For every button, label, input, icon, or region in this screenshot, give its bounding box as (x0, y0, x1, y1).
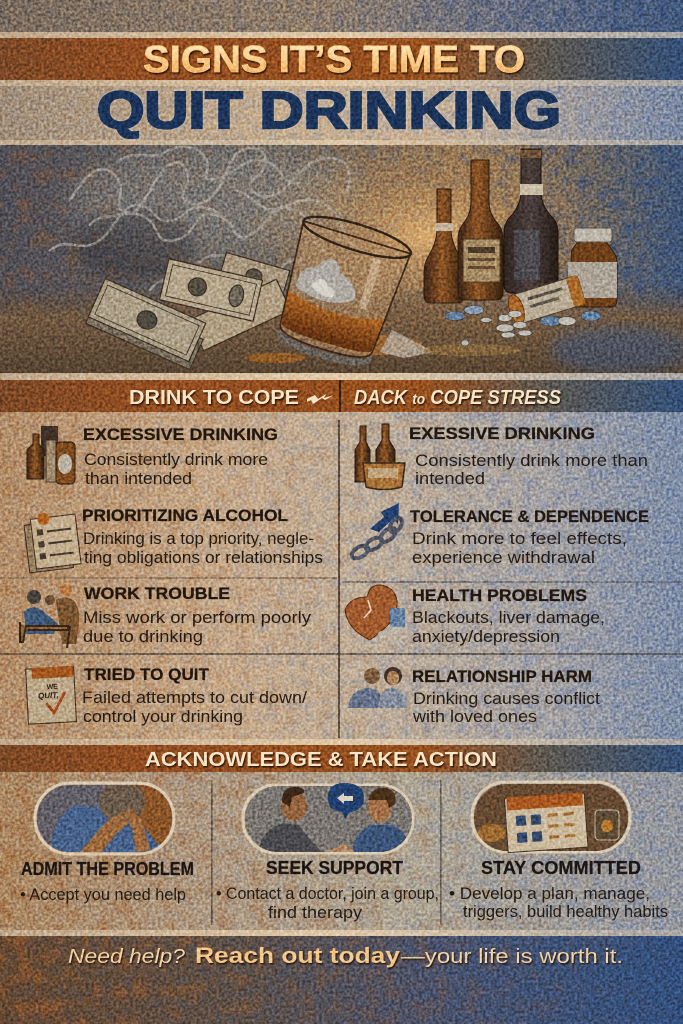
grid of warning signs (0, 420, 683, 738)
hero: beer bottle left (424, 189, 464, 303)
hero: beer bottle left neck label (435, 223, 453, 231)
icon: broken heart and pills (345, 585, 405, 644)
sign: tolerance and dependence: Drink more to feel effects, (412, 529, 627, 548)
sign: relationship harm: with loved ones (412, 707, 537, 726)
illustration: calendar and jar (470, 780, 632, 855)
hero: dark bottle (504, 149, 558, 293)
icon: calendar with check: QUIT, (38, 691, 59, 701)
hero: spill on table (245, 330, 520, 363)
divider strip under hero (0, 373, 683, 381)
sign: work trouble: WORK TROUBLE (84, 585, 230, 603)
hero illustration (0, 130, 683, 375)
icon: calendar with check (26, 666, 76, 724)
icon: squiggle arrow (307, 394, 334, 404)
sign: prioritizing alcohol: PRIORITIZING ALCOHOL (82, 507, 288, 525)
icon: calendar with check: WE (46, 684, 58, 691)
action: stay committed: • Develop a plan, manage, (449, 884, 650, 903)
band heading left: DRINK TO COPE (129, 387, 299, 409)
footer message (68, 943, 623, 968)
action: seek support: find therapy (268, 903, 363, 922)
action: admit the problem (20, 780, 194, 904)
sign: exessive drinking right (355, 424, 648, 490)
action: stay committed: triggers, build healthy habits (463, 902, 668, 921)
footer message: Reach out today (195, 943, 401, 968)
sign: health problems: HEALTH PROBLEMS (412, 587, 587, 605)
action: seek support (216, 780, 439, 922)
sign: prioritizing alcohol: Drinking is a top priority, negle- (83, 529, 314, 548)
sign: excessive drinking: EXCESSIVE DRINKING (83, 426, 278, 444)
sign: excessive drinking: Consistently drink more (84, 450, 268, 469)
sign: tolerance and dependence: experience withdrawal (412, 548, 595, 567)
action: admit the problem: • Accept you need help (20, 885, 186, 904)
sign: prioritizing alcohol: ting obligations or relationships (84, 548, 323, 567)
action: stay committed (449, 780, 668, 921)
title line 2: QUIT DRINKING (97, 82, 561, 140)
sign: work trouble: due to drinking (83, 627, 203, 646)
action: seek support: SEEK SUPPORT (266, 858, 403, 878)
icon: people at a table (20, 584, 79, 648)
section band: acknowledge and take action: ACKNOWLEDGE & TAKE ACTION (145, 749, 497, 771)
icon: bottles and jar (27, 426, 75, 484)
sign: work trouble: Miss work or perform poorly (83, 608, 312, 627)
title line 1: SIGNS IT’S TIME TO (143, 39, 525, 81)
divider strip above footer (0, 930, 683, 936)
illustration: distressed person (30, 780, 180, 855)
section band: drink to cope (0, 380, 683, 412)
sign: health problems: Blackouts, liver damage, (412, 608, 605, 627)
top title band (0, 32, 683, 145)
sign: prioritizing alcohol (23, 507, 323, 573)
sign: exessive drinking right: EXESSIVE DRINKING (409, 425, 595, 443)
hero: tilted whisky glass (267, 209, 414, 374)
sign: tolerance and dependence: TOLERANCE & DEPENDENCE (410, 508, 649, 526)
band heading right: DACK to COPE STRESS (354, 387, 562, 409)
sign: relationship harm (348, 667, 600, 726)
footer message: —your life is worth it. (401, 946, 623, 968)
action panel (20, 780, 668, 925)
action: seek support: • Contact a doctor, join a group, (216, 884, 439, 903)
hero: upright pill bottle (568, 228, 617, 307)
sign: tried to quit: Failed attempts to cut down/ (82, 688, 307, 707)
hero: tall brown bottle (458, 160, 503, 300)
icon: checklist clipboard (23, 509, 81, 573)
illustration: two men talking (240, 780, 420, 855)
sign: relationship harm: RELATIONSHIP HARM (412, 668, 592, 686)
hero: bills of money (86, 252, 291, 370)
icon: two bottles and a glass (355, 424, 405, 490)
sign: excessive drinking (27, 426, 278, 488)
sign: relationship harm: Drinking causes conflict (413, 689, 600, 708)
hero: fallen pill bottle (505, 275, 586, 326)
sign: health problems: anxiety/depression (412, 627, 560, 646)
sign: excessive drinking: than intended (85, 469, 192, 488)
sign: tolerance and dependence (350, 503, 649, 567)
hero: smoke swirls (50, 147, 360, 290)
sign: tried to quit: control your drinking (83, 707, 243, 726)
sign: tried to quit: TRIED TO QUIT (84, 666, 209, 684)
hero: scattered pills (445, 306, 601, 346)
sign: tried to quit (26, 666, 307, 726)
action: admit the problem: ADMIT THE PROBLEM (21, 859, 194, 879)
hero: warm glow and table (0, 130, 683, 375)
icon: two people in conflict (348, 667, 408, 708)
footer message: Need help? (68, 946, 186, 968)
sign: health problems (345, 585, 605, 646)
section band: acknowledge and take action (0, 745, 683, 772)
divider strip above action band (0, 739, 683, 745)
sign: work trouble (20, 584, 312, 648)
sign: exessive drinking right: Consistently drink more than (415, 451, 648, 470)
action: stay committed: STAY COMMITTED (481, 858, 641, 878)
icon: chain with up arrow (350, 503, 404, 561)
sign: exessive drinking right: intended (415, 469, 485, 488)
